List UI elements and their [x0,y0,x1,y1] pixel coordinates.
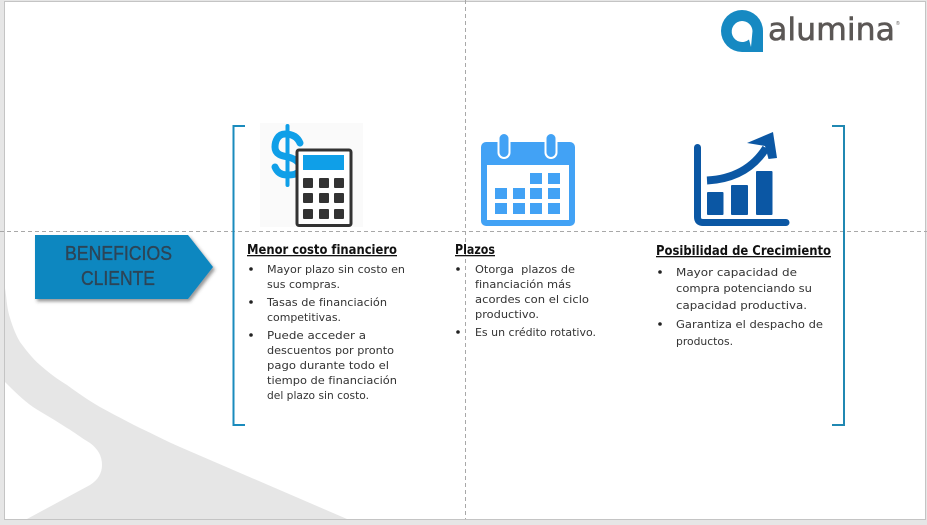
bullet list: productos. [676,335,733,348]
heading: Menor costo financiero [247,243,397,258]
logo: alumina [721,10,900,52]
decorative grey swoosh [5,288,347,519]
bullet list: sus compras. [267,278,340,291]
arrow label: beneficios cliente [35,235,213,299]
icon: calendar [481,133,575,226]
icon: calculator with dollar [260,123,363,227]
column: plazos [455,243,596,339]
right bracket [832,126,844,425]
bullet list [658,266,823,348]
bullet list: productivo. [475,308,539,321]
heading: Posibilidad de Crecimiento [656,244,831,259]
arrow label: beneficios cliente: BENEFICIOS [65,243,172,265]
bullet list [456,263,596,339]
bullet list: Otorga plazos de [475,263,575,276]
column: menor costo financiero [247,243,405,402]
bullet list: Es un crédito rotativo. [475,326,596,339]
icon: growth chart [698,132,786,222]
logo: alumina: alumina [768,12,895,48]
bullet list: acordes con el ciclo [475,293,589,306]
bullet list: Tasas de financiación [266,296,387,309]
bullet list: del plazo sin costo. [267,389,369,402]
bullet list: pago durante todo el [267,359,389,372]
logo: alumina: ® [896,20,900,27]
heading: Plazos [455,243,495,258]
left bracket [234,126,245,425]
bullet list: Mayor plazo sin costo en [267,263,405,276]
bullet list: descuentos por pronto [267,344,394,357]
bullet list: Mayor capacidad de [676,266,797,279]
bullet list: financiación más [475,278,571,291]
bullet list [249,263,405,402]
bullet list: Garantiza el despacho de [676,318,823,331]
bullet list: Puede acceder a [267,329,366,342]
bullet list: tiempo de financiación [267,374,397,387]
bullet list: competitivas. [267,311,341,324]
arrow label: beneficios cliente: CLIENTE [81,268,155,290]
column: posibilidad de crecimiento [656,244,831,348]
bullet list: capacidad productiva. [676,299,807,312]
bullet list: compra potenciando su [676,282,812,295]
